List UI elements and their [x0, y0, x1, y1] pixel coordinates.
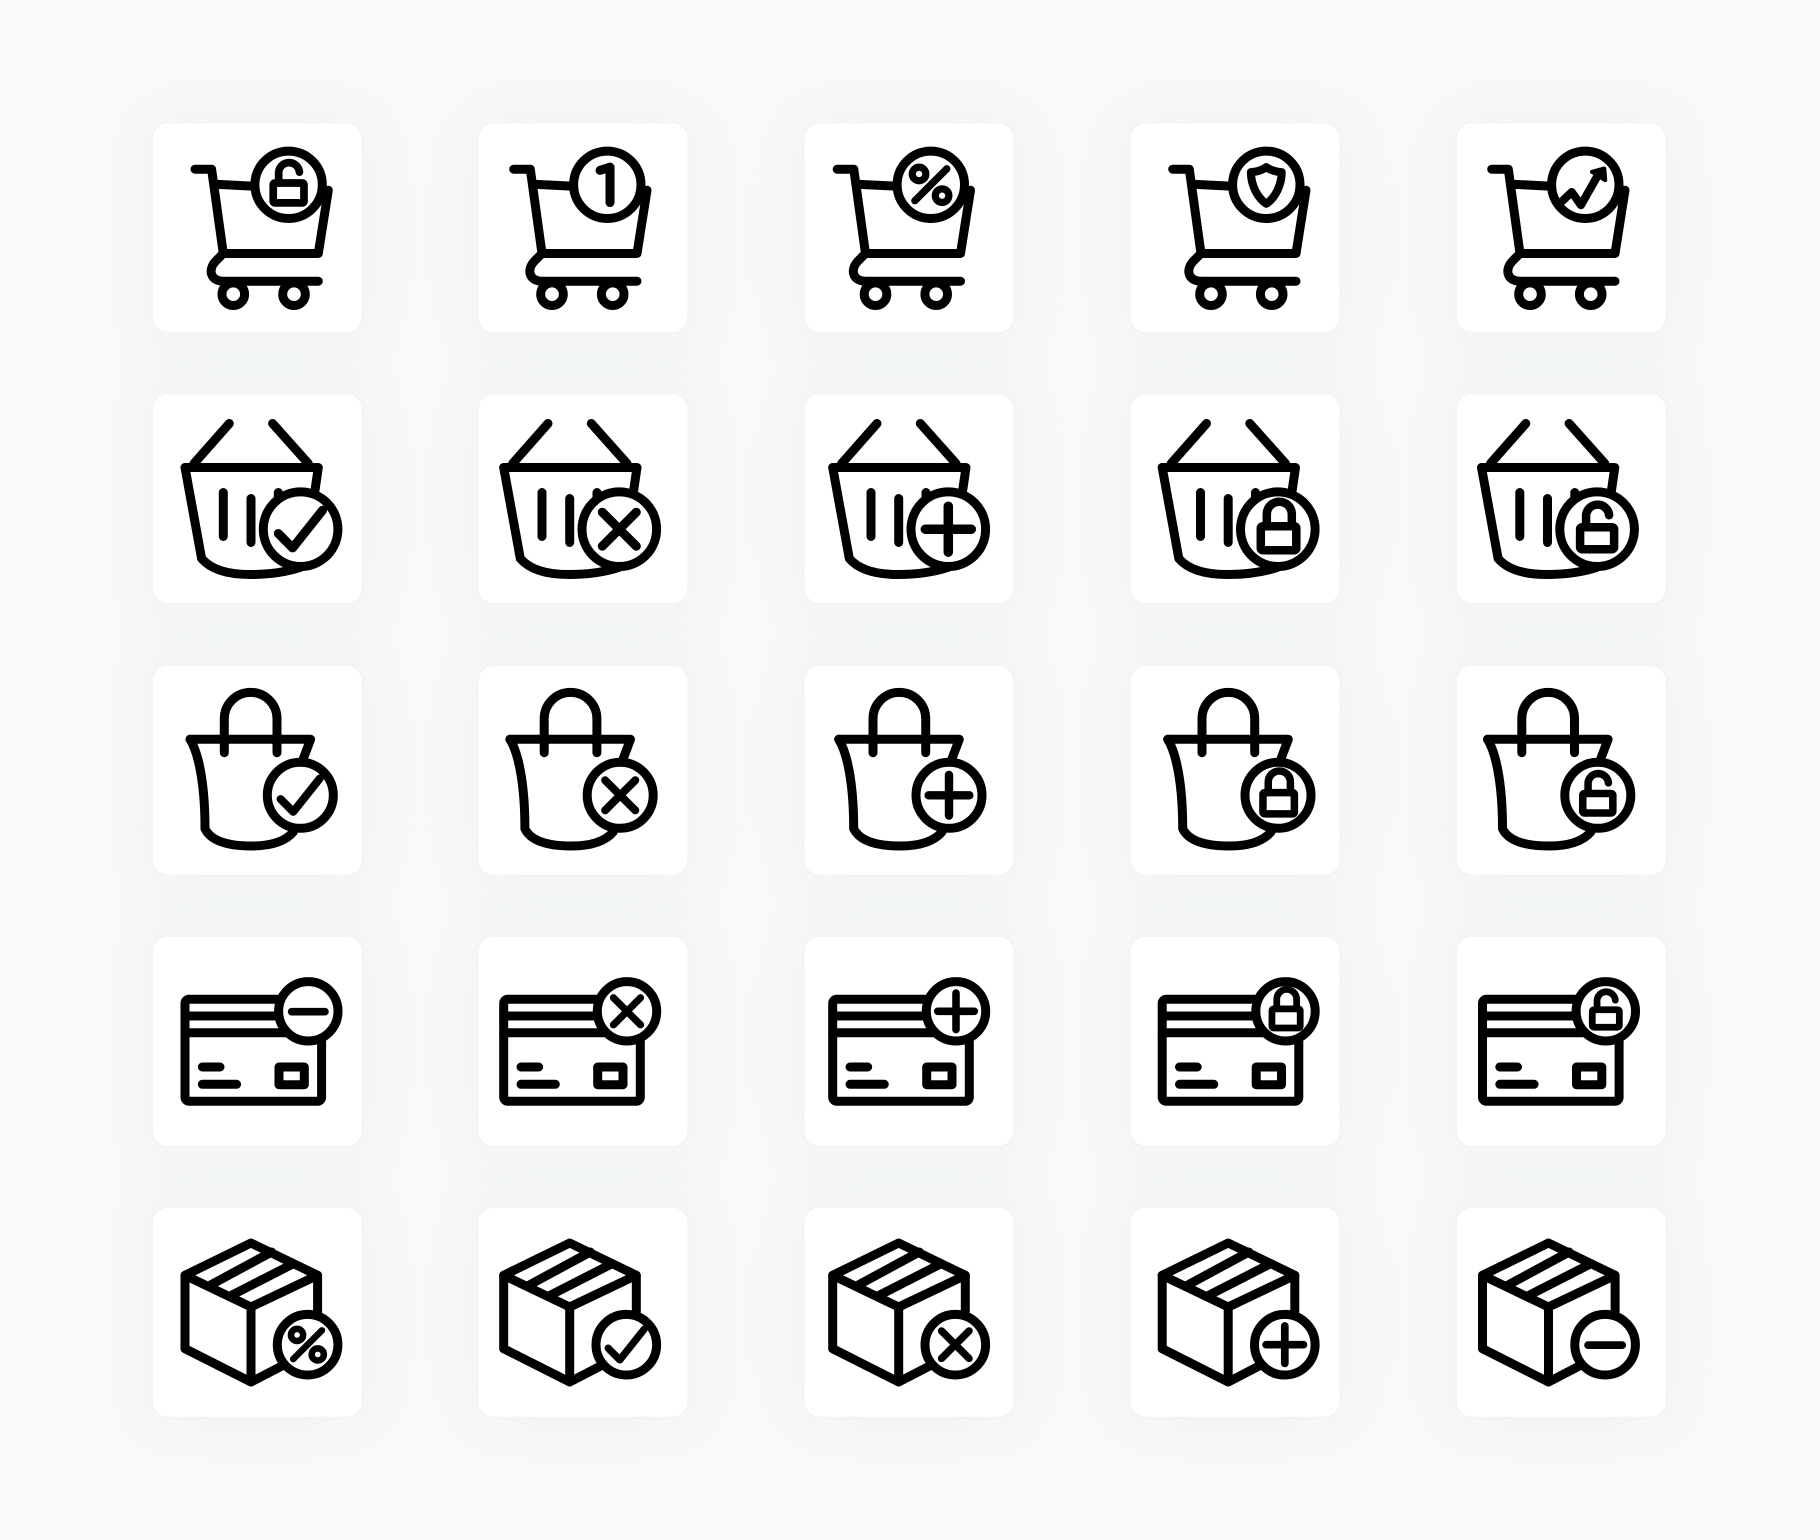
icon card: cart with rising chart [1456, 122, 1666, 333]
icon card: basket with closed lock [1130, 394, 1340, 604]
icon card: box with check [478, 1207, 688, 1418]
icon card: credit card with open lock [1456, 936, 1666, 1146]
icon card: cart with shield [1130, 122, 1340, 333]
icon card: basket with plus [804, 394, 1014, 604]
icon card: cart with number one [478, 122, 688, 333]
icon card: basket with check [152, 394, 362, 604]
soft background glow behind cards [125, 96, 1694, 1445]
icon card: bag with closed lock [1130, 665, 1340, 876]
icon card: box with plus [1130, 1207, 1340, 1418]
icon card: bag with open lock [1456, 665, 1666, 876]
icon card: basket with open lock [1456, 394, 1666, 604]
icon card: cart with open lock [152, 122, 362, 333]
icon card: box with cross [804, 1207, 1014, 1418]
icon card: box with percent [152, 1207, 362, 1418]
icon card: bag with plus [804, 665, 1014, 876]
icon card: basket with cross [478, 394, 688, 604]
icon card: credit card with plus [804, 936, 1014, 1146]
icon card: cart with percent [804, 122, 1014, 333]
icon card: credit card with cross [478, 936, 688, 1146]
icon card: credit card with minus [152, 936, 362, 1146]
icon card: bag with check [152, 665, 362, 876]
icon card: bag with cross [478, 665, 688, 876]
icon card: credit card with closed lock [1130, 936, 1340, 1146]
icon card: box with minus [1456, 1207, 1666, 1418]
